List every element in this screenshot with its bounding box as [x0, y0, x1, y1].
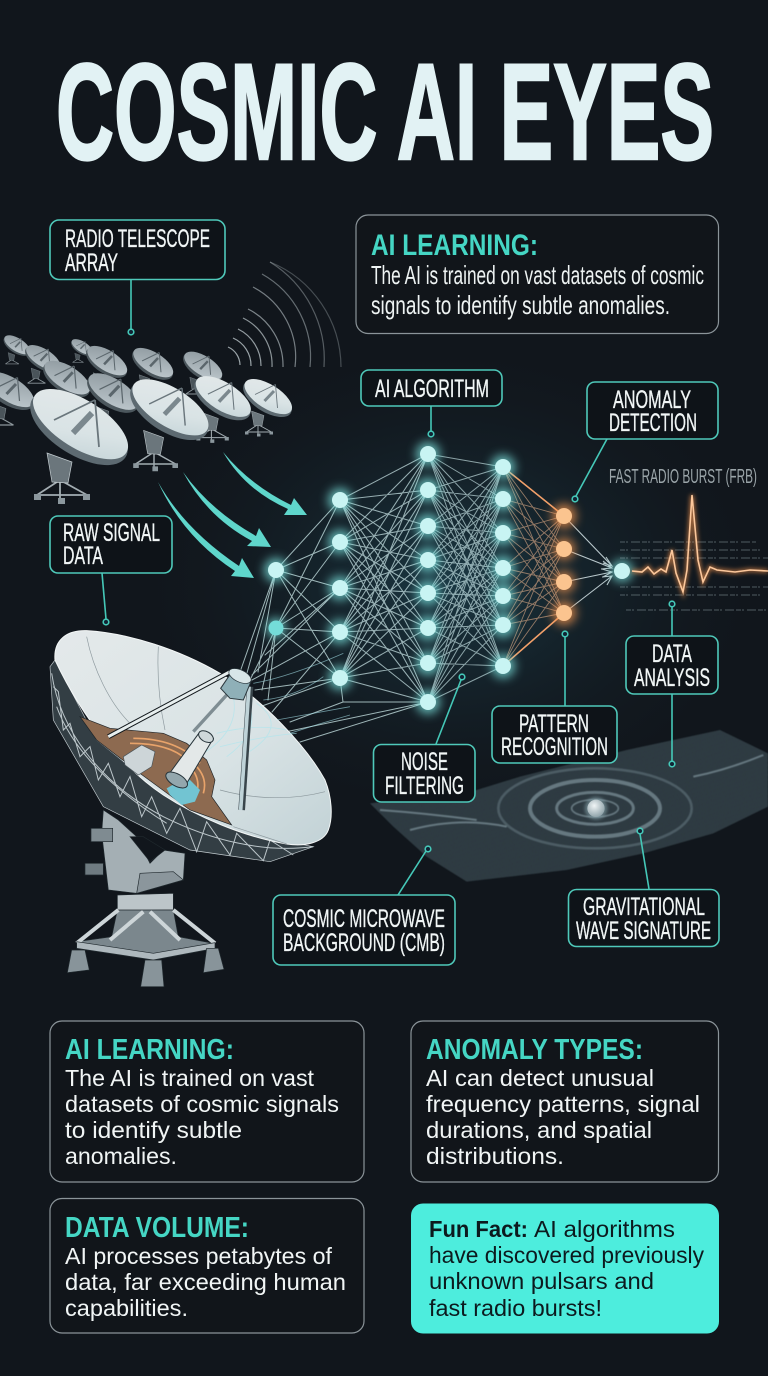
panel: anomaly types: ANOMALY TYPES: — [426, 1034, 643, 1066]
panel: AI learning: The AI is trained on vast — [65, 1065, 315, 1091]
orange node glow — [552, 504, 576, 625]
label: cosmic microwave background — [273, 846, 455, 965]
label: data analysis: DATA — [652, 640, 692, 668]
panel: AI learning top: signals to identify subtle anomalies. — [371, 290, 670, 320]
panel: fun fact: fast radio bursts! — [429, 1295, 602, 1321]
feed struts — [108, 672, 230, 737]
label: cosmic microwave background: COSMIC MICROWAVE — [283, 905, 445, 933]
feed head — [221, 672, 251, 700]
panel: fun fact: unknown pulsars and — [429, 1268, 654, 1294]
beam lines on dish — [203, 653, 350, 757]
panel: AI learning: AI LEARNING: — [65, 1034, 234, 1066]
network edges — [240, 454, 564, 742]
label: cosmic microwave background: BACKGROUND (CMB) — [283, 929, 445, 957]
label: raw signal data — [50, 516, 172, 625]
label: AI algorithm: AI ALGORITHM — [375, 375, 489, 403]
panel: anomaly types: distributions. — [426, 1143, 564, 1169]
label: data analysis: ANALYSIS — [634, 664, 710, 692]
label: anomaly detection: DETECTION — [609, 409, 697, 437]
telescope array — [0, 332, 298, 504]
label: pattern recognition — [492, 631, 617, 763]
fast radio burst waveform — [620, 495, 768, 610]
label: noise filtering — [374, 674, 475, 802]
dish truss — [50, 660, 313, 862]
label: anomaly detection: ANOMALY — [613, 386, 691, 414]
label: noise filtering: NOISE — [401, 748, 448, 776]
large telescope dish — [50, 631, 350, 987]
cutout interior — [80, 717, 232, 825]
nodes — [268, 446, 630, 710]
dish face — [55, 631, 331, 845]
panel: data volume: AI processes petabytes of — [65, 1243, 333, 1269]
label: raw signal data: RAW SIGNAL — [63, 519, 160, 547]
label: raw signal data: DATA — [63, 542, 103, 570]
panel: AI learning: to identify subtle — [65, 1117, 242, 1143]
panel: data volume — [50, 1198, 364, 1333]
output arrows — [564, 516, 612, 613]
label: AI algorithm — [361, 370, 502, 437]
noise dashes — [620, 542, 768, 610]
dish mount — [67, 810, 224, 987]
label: pattern recognition: RECOGNITION — [501, 733, 608, 761]
panel: fun fact — [411, 1204, 719, 1334]
panel: fun fact: Fun Fact: — [429, 1216, 528, 1242]
label: data analysis — [626, 601, 718, 767]
label: radio telescope array: RADIO TELESCOPE — [65, 225, 210, 253]
signal arrows — [158, 452, 307, 578]
neural network — [240, 442, 633, 742]
teal node glow — [264, 442, 633, 714]
panel: data volume: DATA VOLUME: — [65, 1212, 249, 1244]
panel: AI learning top — [356, 215, 718, 334]
label: noise filtering: FILTERING — [385, 772, 464, 800]
label: pattern recognition: PATTERN — [519, 710, 589, 738]
panel: AI learning top: AI LEARNING: — [371, 229, 538, 262]
panel: data volume: data, far exceeding human — [65, 1269, 346, 1295]
panel: anomaly types — [411, 1021, 718, 1182]
label: anomaly detection — [572, 382, 718, 502]
panel: anomaly types: frequency patterns, signal — [426, 1091, 700, 1117]
label: gravitational wave signature — [568, 828, 719, 946]
label: radio telescope array — [50, 220, 225, 335]
receiver tube — [168, 732, 213, 783]
panel: anomaly types: durations, and spatial — [426, 1117, 652, 1143]
orange nodes — [556, 508, 572, 621]
panel: AI learning: anomalies. — [65, 1143, 177, 1169]
panel: fun fact: have discovered previously — [429, 1242, 704, 1268]
panel: anomaly types: AI can detect unusual — [426, 1065, 654, 1091]
radio signal waves — [228, 262, 341, 367]
label: radio telescope array: ARRAY — [65, 249, 118, 277]
gravitational wave surface — [370, 730, 768, 882]
panel: AI learning — [50, 1021, 364, 1182]
panel: fun fact: AI algorithms — [534, 1216, 675, 1242]
panel: AI learning: datasets of cosmic signals — [65, 1091, 339, 1117]
panel: data volume: capabilities. — [65, 1295, 188, 1321]
